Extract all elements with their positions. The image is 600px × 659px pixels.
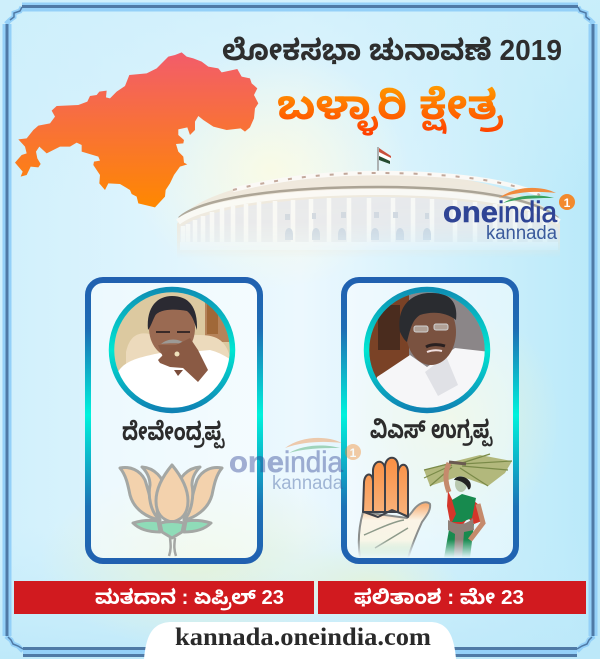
- banner: result date: [318, 581, 586, 614]
- logo: oneindia kannada: one: [443, 196, 498, 229]
- panel: candidate VS Ugrappa (Congress, JDS): [344, 280, 516, 561]
- watermark logo: oneindia kannada: kannada: [272, 473, 343, 494]
- panel: candidate Devendrappa (BJP): [88, 280, 260, 561]
- logo: oneindia kannada: kannada: [486, 223, 557, 244]
- website pill: [144, 622, 456, 659]
- logo: oneindia kannada: india: [498, 196, 557, 229]
- watermark logo: oneindia kannada: one: [229, 446, 284, 479]
- icon: BJP lotus: [120, 465, 222, 556]
- portrait: VS Ugrappa: [365, 288, 490, 412]
- banner: result date: ಫಲಿತಾಂಶ : ಮೇ 23: [354, 587, 524, 609]
- icon: woman farmer carrying grain sheaf: [424, 454, 512, 558]
- icon: Congress hand: [359, 458, 430, 558]
- watermark logo: oneindia kannada: 1: [350, 446, 357, 460]
- map of Ballari constituency: [15, 52, 258, 207]
- heading: Lok Sabha election 2019: ಲೋಕಸಭಾ ಚುನಾವಣೆ 2019: [222, 35, 562, 67]
- parliament building with flag: [177, 147, 560, 260]
- banner: polling date: ಮತದಾನ : ಏಪ್ರಿಲ್ 23: [95, 587, 284, 611]
- logo: oneindia kannada: 1: [564, 196, 571, 210]
- watermark logo: oneindia kannada: [229, 438, 361, 494]
- logo: oneindia kannada: [443, 188, 575, 244]
- portrait: Devendrappa: [110, 288, 234, 412]
- watermark logo: oneindia kannada: india: [284, 446, 343, 479]
- name: VS Ugrappa: ವಿಎಸ್ ಉಗ್ರಪ್ಪ: [370, 416, 493, 447]
- website pill: kannada.oneindia.com: [175, 624, 431, 651]
- heading: Ballari constituency: ಬಳ್ಳಾರಿ ಕ್ಷೇತ್ರ: [277, 82, 504, 136]
- banner: polling date: [14, 581, 314, 614]
- name: Devendrappa: ದೇವೇಂದ್ರಪ್ಪ: [122, 418, 225, 449]
